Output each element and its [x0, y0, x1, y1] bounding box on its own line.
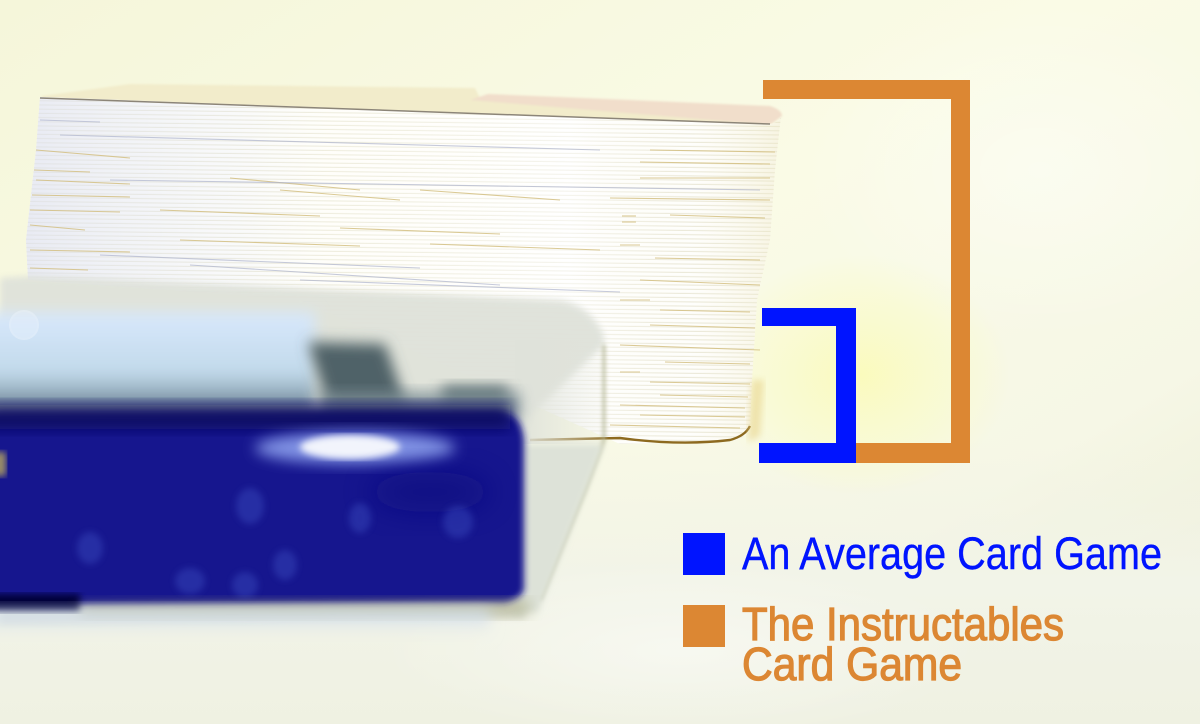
stack shadow glow: [748, 380, 764, 442]
top card edge: [40, 98, 770, 124]
orange bracket: The Instructables Card Game height: [763, 80, 970, 463]
legend item: Instructables card game: [683, 598, 1064, 690]
navy card box: [0, 413, 524, 606]
worn edge accents: [30, 150, 775, 428]
dark shadow under highlight: [370, 472, 490, 512]
stack bottom edge: [530, 426, 750, 443]
floor below box: [0, 610, 490, 640]
blue bracket: average card game height: [759, 308, 856, 463]
case lower right face: [515, 444, 604, 614]
case corner translucent panel over the stack: [515, 340, 605, 444]
bokeh dots: [77, 488, 473, 598]
stack of card edges: [26, 97, 781, 444]
clear plastic case upper part: [0, 276, 604, 625]
legend: [683, 528, 1162, 690]
box highlight: [255, 432, 455, 464]
black base strip: [0, 594, 80, 612]
legend item: Instructables card game: The Instructables: [742, 598, 1064, 650]
dark reflection patches: [308, 342, 408, 412]
dark upper band: [0, 405, 510, 429]
card stack photo: [26, 84, 782, 444]
warm spot at left edge: [0, 452, 6, 476]
top face of stack: [42, 84, 782, 125]
legend item: Instructables card game: Card Game: [742, 638, 962, 690]
pale blue band: [0, 312, 315, 412]
lens flare ring: [10, 311, 38, 339]
case front edge reflection: [540, 345, 604, 600]
olive shadow under box: [80, 600, 530, 616]
blurred card box in foreground: [0, 276, 605, 640]
